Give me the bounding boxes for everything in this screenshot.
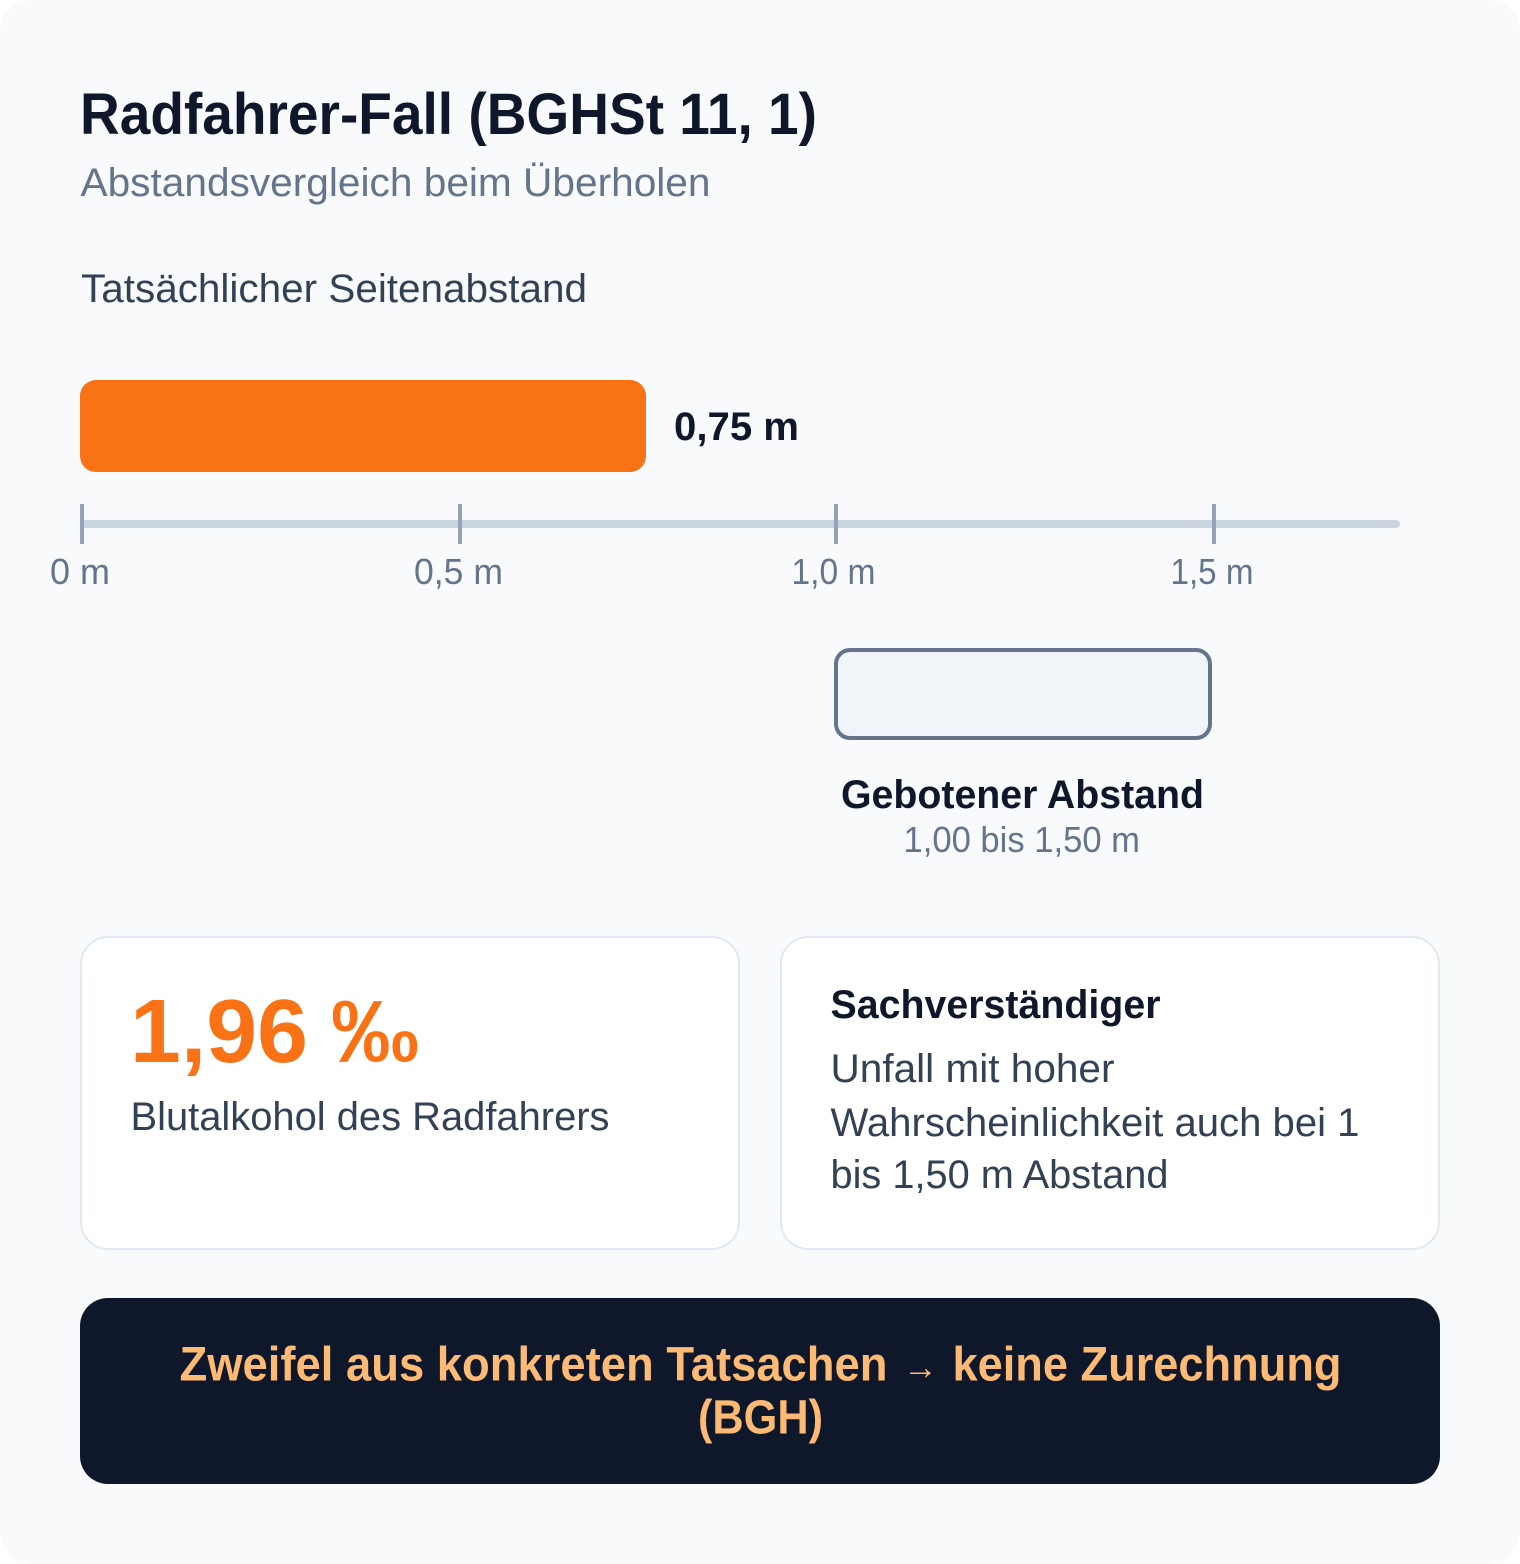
range heading: Gebotener Abstand (841, 773, 1204, 817)
required distance range (836, 650, 1210, 860)
big number: 1,96 (130, 982, 308, 1082)
panel: expert (781, 937, 1439, 1249)
banner text: keine Zurechnung (952, 1338, 1342, 1392)
title: Radfahrer-Fall (BGHSt 11, 1) (80, 82, 817, 147)
tick label 0,5 m: 0,5 m (414, 551, 503, 592)
bar value: 0,75 m (674, 405, 799, 449)
distance axis (50, 504, 1400, 592)
axis line (80, 520, 1400, 528)
banner text (180, 1338, 1342, 1444)
card body: Wahrscheinlichkeit auch bei 1 (830, 1101, 1360, 1145)
card body: bis 1,50 m Abstand (830, 1153, 1168, 1197)
card caption: Blutalkohol des Radfahrers (130, 1095, 610, 1139)
bar: actual distance (80, 380, 646, 472)
tick label 0 m: 0 m (50, 551, 110, 592)
card body (830, 1047, 1360, 1197)
subtitle: Abstandsvergleich beim Überholen (80, 161, 710, 205)
banner text: → (903, 1348, 938, 1387)
card body: Unfall mit hoher (830, 1047, 1114, 1091)
conclusion banner (80, 1298, 1440, 1484)
tick label 1,0 m: 1,0 m (792, 551, 876, 592)
banner text: (BGH) (698, 1392, 823, 1444)
tick 0.5 m (458, 504, 462, 544)
bar chart: actual distance (80, 380, 799, 472)
range value: 1,00 bis 1,50 m (904, 819, 1140, 860)
tick 0 m (80, 504, 84, 544)
card heading: Sachverständiger (830, 983, 1160, 1027)
range box (836, 650, 1210, 738)
panel: blood alcohol (81, 937, 739, 1249)
card background (781, 937, 1439, 1249)
banner text: Zweifel aus konkreten Tatsachen (180, 1338, 888, 1392)
section label: Tatsächlicher Seitenabstand (81, 267, 587, 311)
big number (130, 982, 419, 1082)
banner background (80, 1298, 1440, 1484)
tick label 1,5 m: 1,5 m (1170, 551, 1254, 592)
tick 1.5 m (1212, 504, 1216, 544)
tick 1.0 m (834, 504, 838, 544)
card background (81, 937, 739, 1249)
big number: ‰ (331, 982, 419, 1081)
